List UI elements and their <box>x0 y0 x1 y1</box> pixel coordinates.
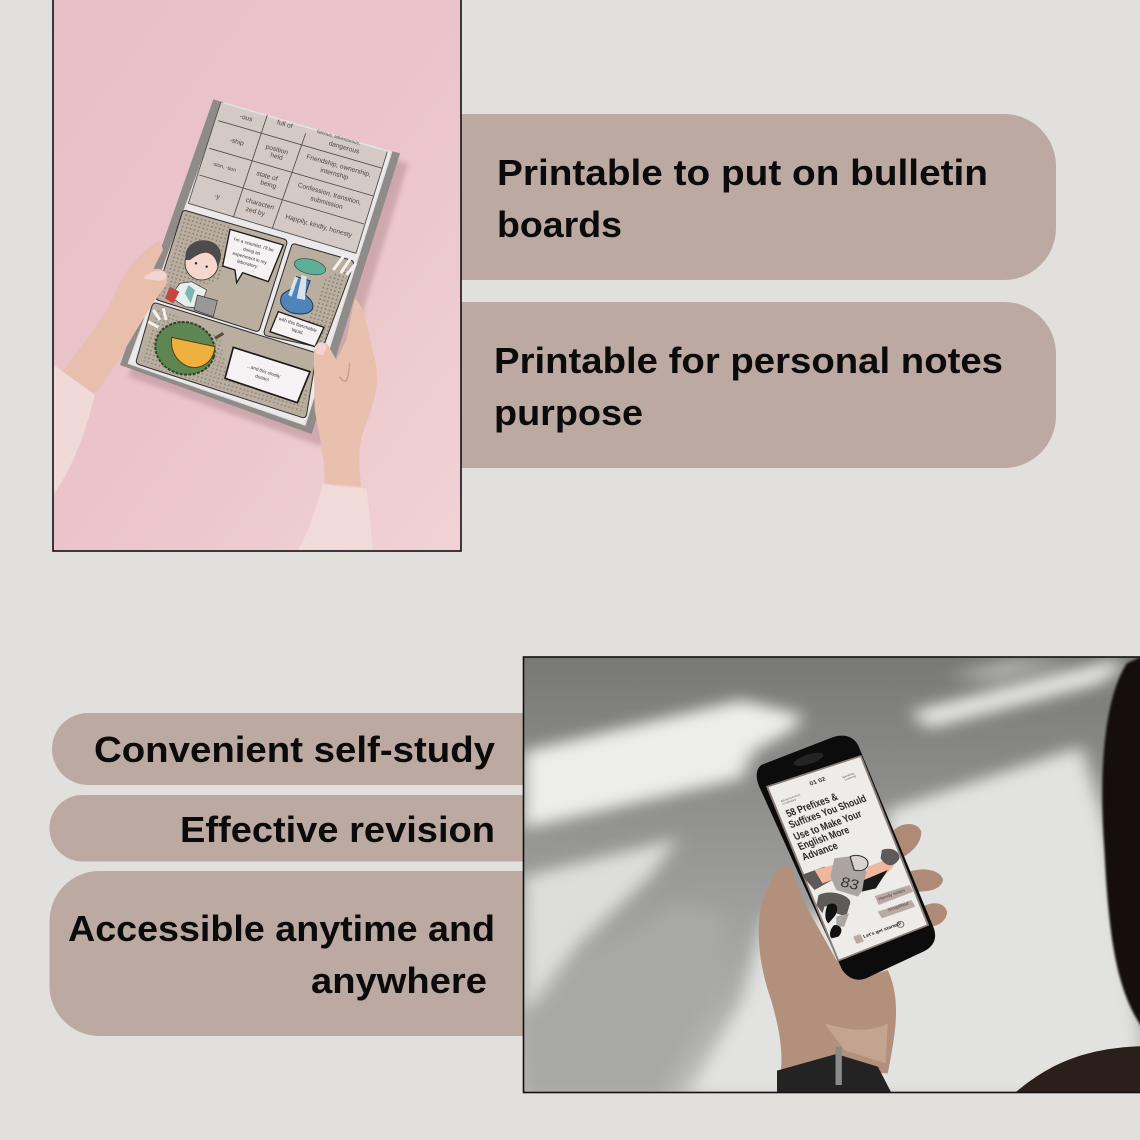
screen title: Suffixes You Should <box>787 793 869 831</box>
screen header: vocabulary <box>781 797 798 806</box>
panel: accessible anytime and anywhere: anywhere <box>311 960 487 1001</box>
vocabulary table: being <box>259 179 277 190</box>
panel: printable benefit one: boards <box>497 204 622 245</box>
photo one frame <box>53 0 461 551</box>
screen tags: Simplified <box>887 901 910 913</box>
phone screen <box>767 756 928 961</box>
vocabulary table: dangerous <box>328 140 361 156</box>
screen button <box>853 921 904 944</box>
vocabulary table: Confession, transition, <box>297 182 362 207</box>
caption box <box>225 347 310 403</box>
panel: convenient self-study: Convenient self-study <box>94 729 495 770</box>
screen header: 01 02 <box>809 776 827 787</box>
blurred light patches <box>524 660 1140 1097</box>
watch band <box>777 1047 892 1093</box>
vocabulary table: -ous <box>239 113 254 124</box>
screen header: Speaking <box>841 771 855 779</box>
panel: accessible anytime and anywhere <box>50 871 523 1036</box>
speech bubble: laboratory. <box>237 259 259 269</box>
panel: printable benefit two <box>461 302 1056 468</box>
vocabulary table: zed by <box>245 206 266 218</box>
right sleeve <box>298 484 373 550</box>
comic panel: flask <box>264 244 356 348</box>
speech bubble: doing an <box>242 246 261 256</box>
panel: accessible anytime and anywhere: Accessible anytime and <box>68 908 495 949</box>
hand <box>759 866 896 1073</box>
vocabulary table: Friendship, ownership, <box>305 154 372 179</box>
vocabulary table: characteri <box>245 197 275 212</box>
screen button: Let's get started! <box>862 921 903 940</box>
speech bubble <box>223 229 283 283</box>
panel: printable benefit one <box>461 114 1056 280</box>
caption box: with this flammable <box>278 316 318 333</box>
screen header: Learning <box>844 774 857 782</box>
worksheet paper <box>120 99 408 447</box>
panel: effective revision: Effective revision <box>180 809 495 850</box>
fingers <box>894 824 947 927</box>
vocabulary table: famous, adventurous, <box>316 129 361 146</box>
panel: printable benefit two: Printable for personal notes <box>494 340 1003 381</box>
caption box: durian! <box>255 373 270 382</box>
photo two frame <box>524 657 1140 1092</box>
hands and sleeves <box>51 240 377 550</box>
caption box: ...and this smelly <box>247 364 282 379</box>
screen title: Advance <box>800 841 840 863</box>
vocabulary table: -y <box>213 193 221 201</box>
photo: hands holding printed worksheet <box>51 0 461 551</box>
photo: hand holding phone <box>523 653 1140 1097</box>
person's shoulder <box>1014 1046 1140 1093</box>
screen tags: Handy notes <box>877 888 907 902</box>
vocabulary table <box>188 103 387 253</box>
caption box: liquid. <box>291 327 304 335</box>
screen title: 58 Prefixes & <box>784 792 840 820</box>
screen title <box>784 792 869 863</box>
right hand <box>314 298 377 487</box>
vocabulary table: state of <box>255 170 279 183</box>
panel: printable benefit two: purpose <box>494 392 643 433</box>
caption box <box>270 312 324 347</box>
vocabulary table: submission <box>309 195 344 211</box>
football player illustration: 83 <box>838 875 861 894</box>
screen title: Use to Make Your <box>792 809 864 843</box>
left hand <box>63 240 168 394</box>
vocabulary table: -sion, -tion <box>211 161 237 174</box>
screen tags <box>875 885 915 918</box>
vocabulary table: internship <box>319 167 349 182</box>
comic panel: durian <box>136 303 316 418</box>
vocabulary table: Happily, kindly, honesty <box>284 214 353 239</box>
panel: convenient self-study <box>52 713 523 785</box>
vocabulary table: full of <box>276 119 293 130</box>
panel: printable benefit one: Printable to put on bulletin <box>497 152 988 193</box>
vocabulary table: -ship <box>229 137 245 148</box>
vocabulary table: held <box>269 152 284 162</box>
person's head <box>1102 653 1140 1037</box>
durian illustration <box>148 308 223 382</box>
screen header: Advanced level <box>780 793 801 803</box>
speech bubble: experiment in my <box>232 251 268 265</box>
screen header <box>780 771 857 806</box>
speech bubble: I'm a scientist. I'll be <box>233 236 275 253</box>
panel: effective revision <box>49 795 523 862</box>
left sleeve <box>51 363 95 495</box>
vocabulary table: position <box>265 144 289 157</box>
flask illustration <box>281 256 356 314</box>
phone <box>757 736 935 980</box>
comic panel: scientist <box>156 211 287 331</box>
screen title: English More <box>796 825 851 853</box>
football player illustration <box>802 849 900 938</box>
scientist figure <box>165 240 221 317</box>
